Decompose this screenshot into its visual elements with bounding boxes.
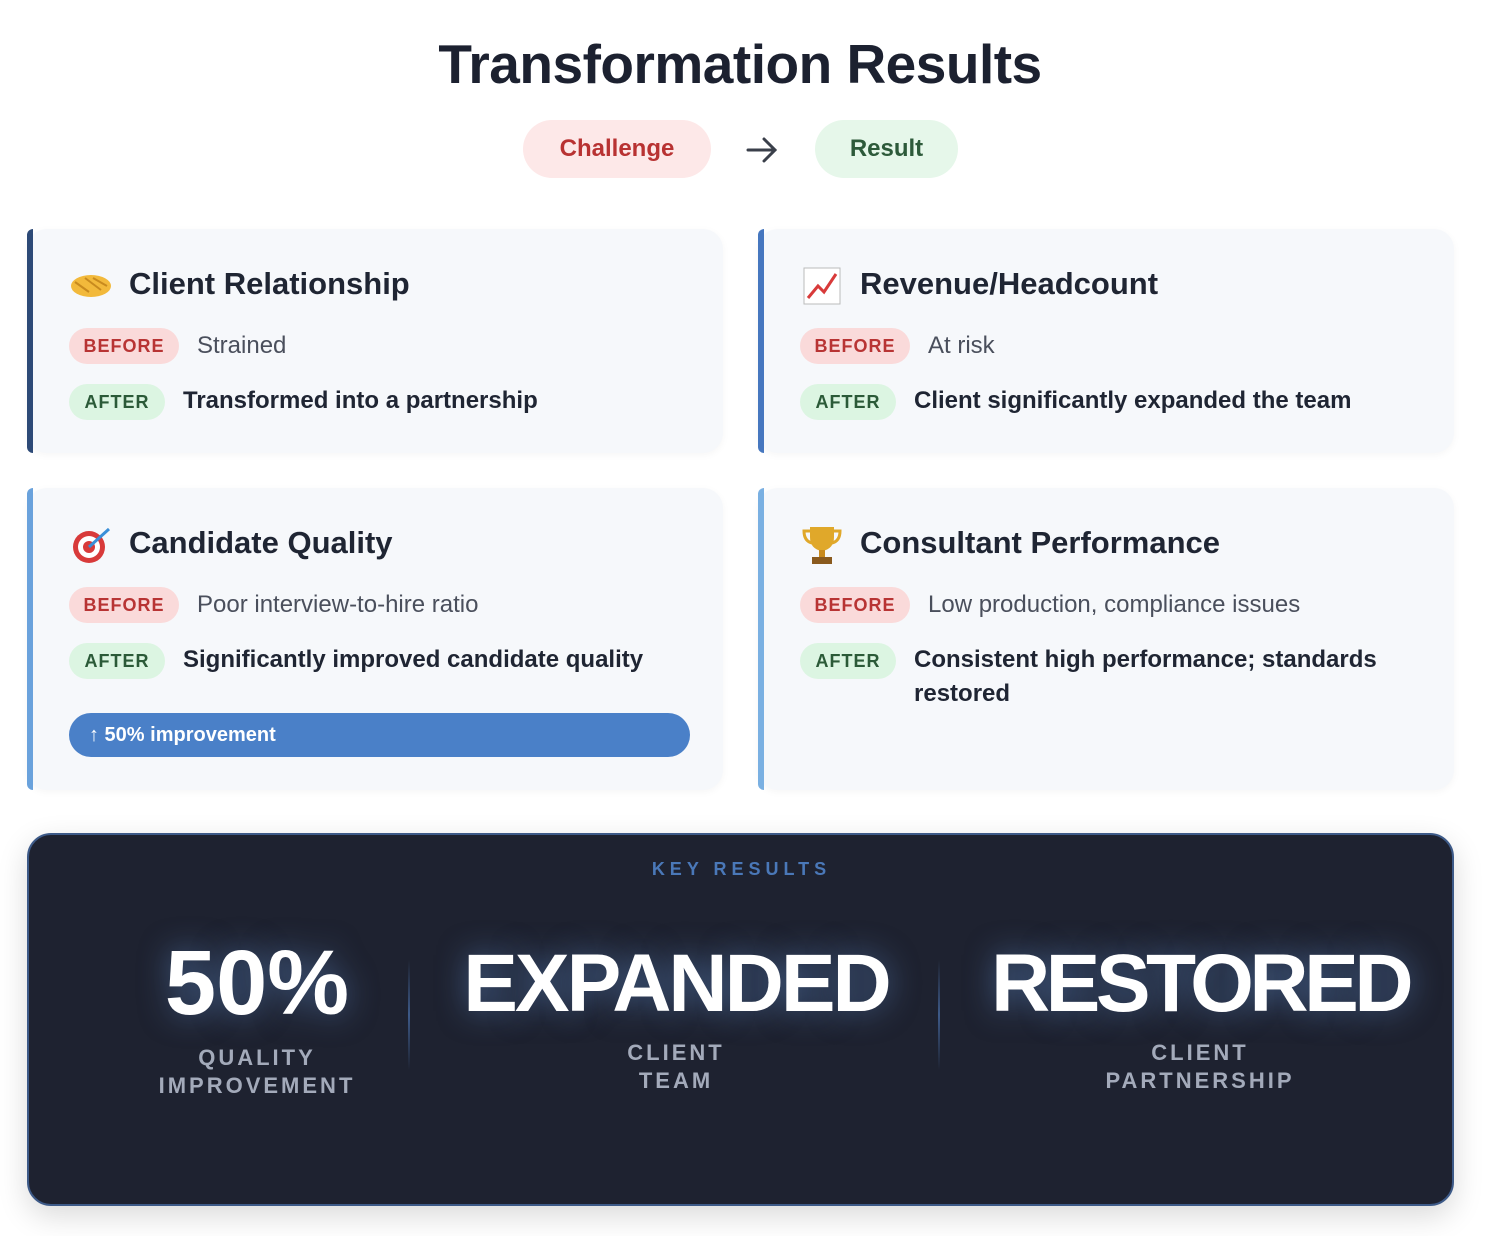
stat: restored <box>979 938 1424 1093</box>
heading: Candidate Quality <box>129 525 393 560</box>
after row: Client significantly expanded the team <box>914 387 1351 414</box>
stat: expanded: EXPANDED <box>463 938 889 1029</box>
panel: key results <box>27 833 1454 1206</box>
heading: Client Relationship <box>129 266 410 301</box>
heading: Consultant Performance <box>860 525 1220 560</box>
legend: challenge pill: Challenge <box>560 135 674 162</box>
stat: expanded: TEAM <box>639 1068 713 1093</box>
stat: restored: RESTORED <box>991 938 1409 1029</box>
stat: expanded <box>452 938 903 1093</box>
heading: Revenue/Headcount <box>860 266 1158 301</box>
title: Transformation Results <box>438 33 1042 95</box>
progress bar: 50% improvement <box>69 713 690 757</box>
stat: restored: CLIENT <box>1151 1040 1249 1065</box>
icon: target <box>73 528 110 563</box>
panel: client relationship <box>27 229 723 453</box>
icon: trophy <box>802 527 842 564</box>
before row: Poor interview-to-hire ratio <box>197 591 478 618</box>
before row: BEFORE <box>83 594 164 614</box>
before row <box>69 328 286 364</box>
panel: consultant performance <box>758 488 1454 790</box>
panel: revenue/headcount <box>758 229 1454 453</box>
key results heading: KEY RESULTS <box>652 859 831 879</box>
legend: result pill: Result <box>850 135 923 162</box>
after row: Significantly improved candidate quality <box>183 646 643 673</box>
after row <box>69 643 643 679</box>
before row: Low production, compliance issues <box>928 591 1300 618</box>
before row: BEFORE <box>83 336 164 356</box>
stat: expanded: CLIENT <box>627 1040 725 1065</box>
legend: challenge pill <box>523 120 711 178</box>
after row: AFTER <box>84 392 150 412</box>
stat: 50%: IMPROVEMENT <box>159 1073 355 1098</box>
after row: AFTER <box>84 650 150 670</box>
legend: result pill <box>815 120 958 178</box>
after row <box>69 384 538 420</box>
before row: Strained <box>197 332 286 359</box>
stat: 50% <box>154 932 360 1098</box>
stat: restored: PARTNERSHIP <box>1105 1068 1295 1093</box>
before row <box>800 587 1300 623</box>
icon: handshake <box>71 275 111 297</box>
after row: Transformed into a partnership <box>183 387 538 414</box>
before row: BEFORE <box>814 594 896 614</box>
after row: AFTER <box>816 650 880 670</box>
after row: Consistent high performance; standards restored <box>914 646 1377 707</box>
stat: 50%: 50% <box>165 932 349 1034</box>
before row <box>69 587 478 623</box>
legend arrow <box>746 137 777 163</box>
icon: chart <box>804 268 840 304</box>
before row <box>800 328 995 364</box>
progress bar: 50% improvement: ↑ 50% improvement <box>89 724 276 746</box>
panel: candidate quality <box>27 488 723 790</box>
after row <box>800 384 1351 420</box>
before row: At risk <box>928 332 995 359</box>
stat: 50%: QUALITY <box>198 1045 316 1070</box>
before row: BEFORE <box>814 336 896 356</box>
after row: AFTER <box>816 392 880 412</box>
